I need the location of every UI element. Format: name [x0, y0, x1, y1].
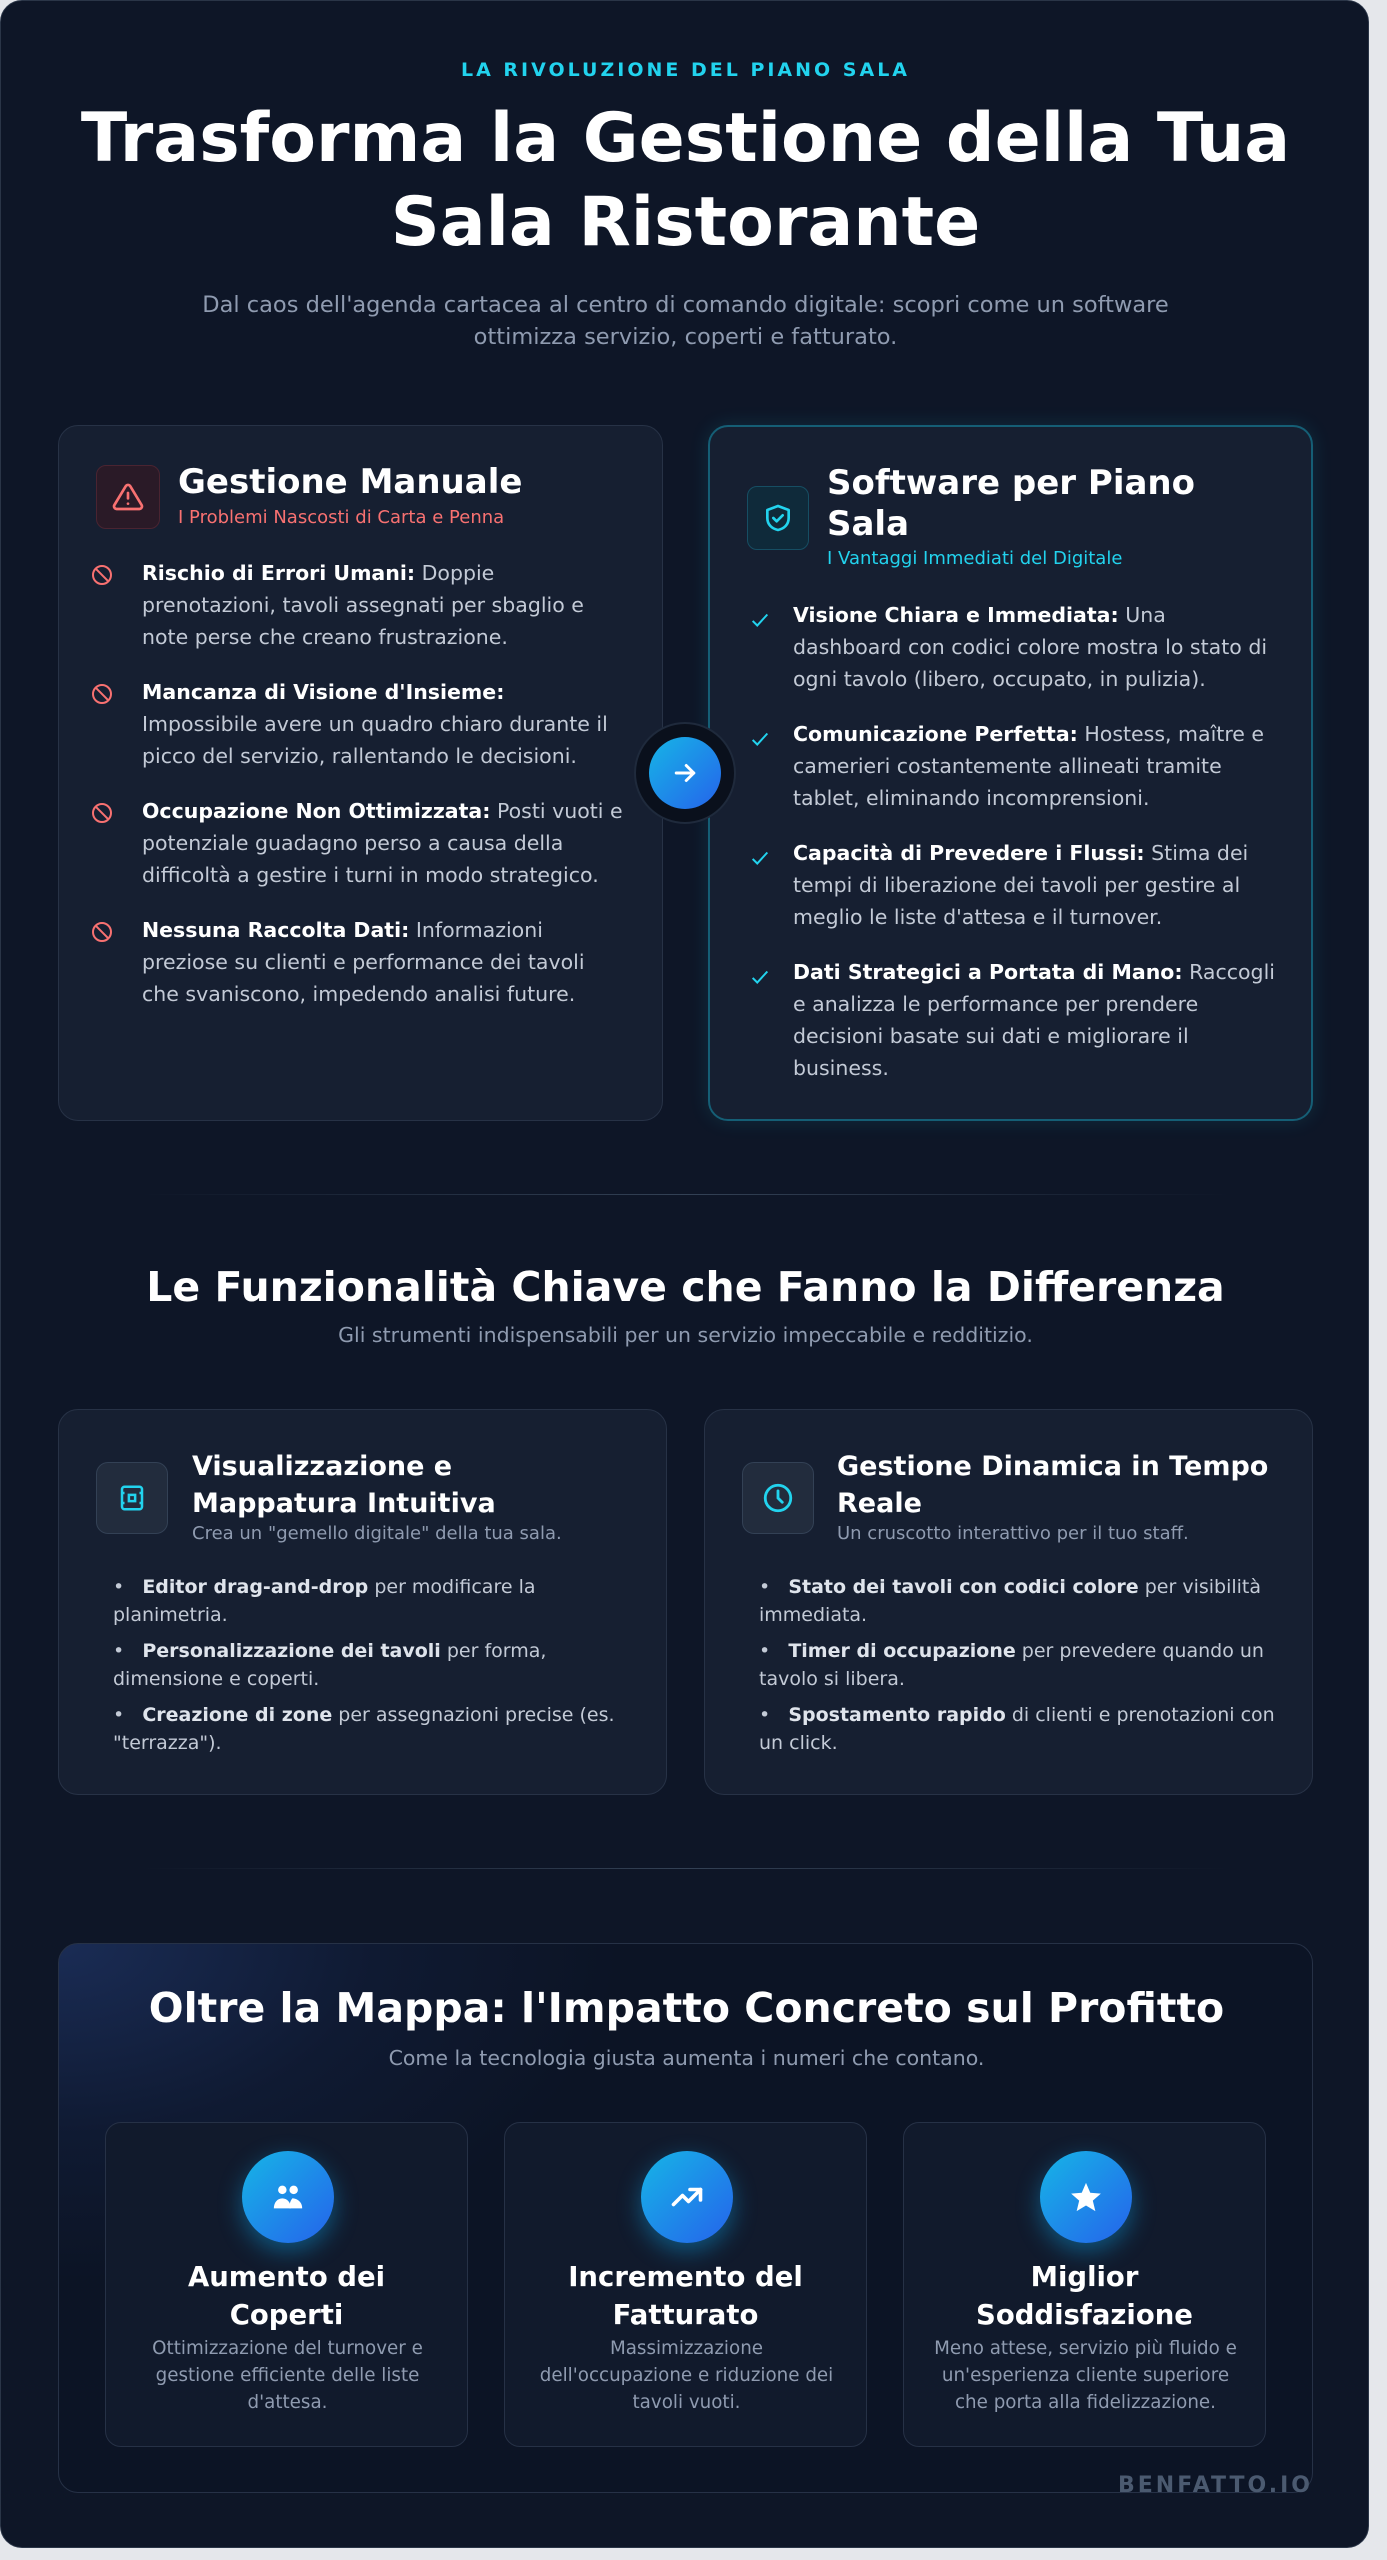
heading: funzionalità: Le Funzionalità Chiave che Fanno la Differenza: [146, 1263, 1225, 1311]
item 2: Comunicazione Perfetta: Hostess, maître e camerieri costantemente allineati tramite tablet, eliminando incomprensioni.: [793, 722, 1264, 810]
title: [81, 99, 1290, 262]
title: Incremento del: [568, 2261, 803, 2293]
bullets: • Personalizzazione dei tavoli per forma, dimensione e coperti.: [113, 1640, 546, 1690]
bullets: • Creazione di zone per assegnazioni precise (es. "terrazza").: [113, 1704, 615, 1754]
icon: star: [1040, 2151, 1132, 2243]
panel: gestione manuale: [58, 425, 663, 1121]
subheading: Gli strumenti indispensabili per un servizio impeccabile e redditizio.: [338, 1323, 1033, 1347]
title: Visualizzazione e Mappatura Intuitiva: [192, 1451, 496, 1519]
item 1: Visione Chiara e Immediata: Una dashboard con codici colore mostra lo stato di ogni tavolo (libero, occupato, in pulizia).: [793, 603, 1267, 691]
subheading: Come la tecnologia giusta aumenta i numeri che contano.: [389, 2046, 984, 2070]
panel: gestione dinamica: [704, 1409, 1313, 1795]
bullets: [759, 1576, 1275, 1754]
icon: trend: [641, 2151, 733, 2243]
subheading: I Problemi Nascosti di Carta e Penna: [178, 507, 504, 528]
subtitle: Crea un "gemello digitale" della tua sala.: [192, 1523, 562, 1544]
card: fatturato: [504, 2122, 867, 2447]
icon: users: [242, 2151, 334, 2243]
list: problems: [92, 561, 623, 1006]
title: Sala Ristorante: [391, 183, 980, 262]
icon: shield: [747, 486, 809, 550]
description: Ottimizzazione del turnover e gestione efficiente delle liste d'attesa.: [152, 2338, 423, 2413]
item 2: Mancanza di Visione d'Insieme: Impossibile avere un quadro chiaro durante il picco del servizio, rallentando le decisioni.: [142, 680, 608, 768]
heading: Software per Piano Sala: [827, 463, 1195, 544]
bullets: • Timer di occupazione per prevedere quando un tavolo si libera.: [759, 1640, 1264, 1690]
title: [568, 2261, 803, 2331]
bullets: • Stato dei tavoli con codici colore per visibilità immediata.: [759, 1576, 1261, 1626]
icon: warning: [96, 465, 160, 529]
title: Miglior: [1031, 2261, 1138, 2293]
bullets: [113, 1576, 615, 1754]
card: coperti: [105, 2122, 468, 2447]
title: Gestione Dinamica in Tempo Reale: [837, 1451, 1268, 1519]
description: Meno attese, servizio più fluido e un'esperienza cliente superiore che porta alla fidelizzazione.: [934, 2338, 1237, 2413]
bullets: • Editor drag-and-drop per modificare la planimetria.: [113, 1576, 536, 1626]
list: benefits: [752, 603, 1275, 1080]
description: Massimizzazione: [610, 2338, 763, 2359]
heading: Oltre la Mappa: l'Impatto Concreto sul Profitto: [149, 1984, 1224, 2032]
panel: visualizzazione: [58, 1409, 667, 1795]
subtitle: Un cruscotto interattivo per il tuo staff.: [837, 1523, 1189, 1544]
item 4: Dati Strategici a Portata di Mano: Raccogli e analizza le performance per prendere decisioni basate sui dati e migliorare il business.: [793, 960, 1275, 1080]
title: Coperti: [230, 2299, 343, 2331]
subheading: I Vantaggi Immediati del Digitale: [827, 548, 1122, 569]
item 4: Nessuna Raccolta Dati: Informazioni preziose su clienti e performance dei tavoli che svaniscono, impedendo analisi future.: [142, 918, 585, 1006]
icon: map: [96, 1462, 168, 1534]
item 1: Rischio di Errori Umani: Doppie prenotazioni, tavoli assegnati per sbaglio e note perse che creano frustrazione.: [142, 561, 584, 649]
heading: Gestione Manuale: [178, 462, 522, 502]
description: dell'occupazione e riduzione dei tavoli vuoti.: [540, 2365, 833, 2413]
card: soddisfazione: [903, 2122, 1266, 2447]
item 3: Occupazione Non Ottimizzata: Posti vuoti e potenziale guadagno perso a causa della difficoltà a gestire i turni in modo strategico.: [142, 799, 623, 887]
panel: impatto: [58, 1943, 1313, 2493]
title: Soddisfazione: [976, 2299, 1193, 2331]
title: Trasforma la Gestione della Tua: [81, 99, 1290, 178]
bullets: • Spostamento rapido di clienti e prenotazioni con un click.: [759, 1704, 1275, 1754]
title: Aumento dei: [188, 2261, 385, 2293]
title: Fatturato: [613, 2299, 758, 2331]
brand: BENFATTO.IO: [1118, 2473, 1313, 2498]
icon: clock: [742, 1462, 814, 1534]
arrow: [634, 722, 736, 824]
item 3: Capacità di Prevedere i Flussi: Stima dei tempi di liberazione dei tavoli per gestire al meglio le liste d'attesa e il turnover.: [793, 841, 1248, 929]
eyebrow: LA RIVOLUZIONE DEL PIANO SALA: [461, 59, 910, 81]
description: [540, 2338, 833, 2413]
panel: software: [708, 425, 1313, 1121]
title: [976, 2261, 1193, 2331]
title: [188, 2261, 385, 2331]
subtitle: Dal caos dell'agenda cartacea al centro di comando digitale: scopri come un software ottimizza servizio, coperti e fatturato.: [202, 292, 1169, 350]
